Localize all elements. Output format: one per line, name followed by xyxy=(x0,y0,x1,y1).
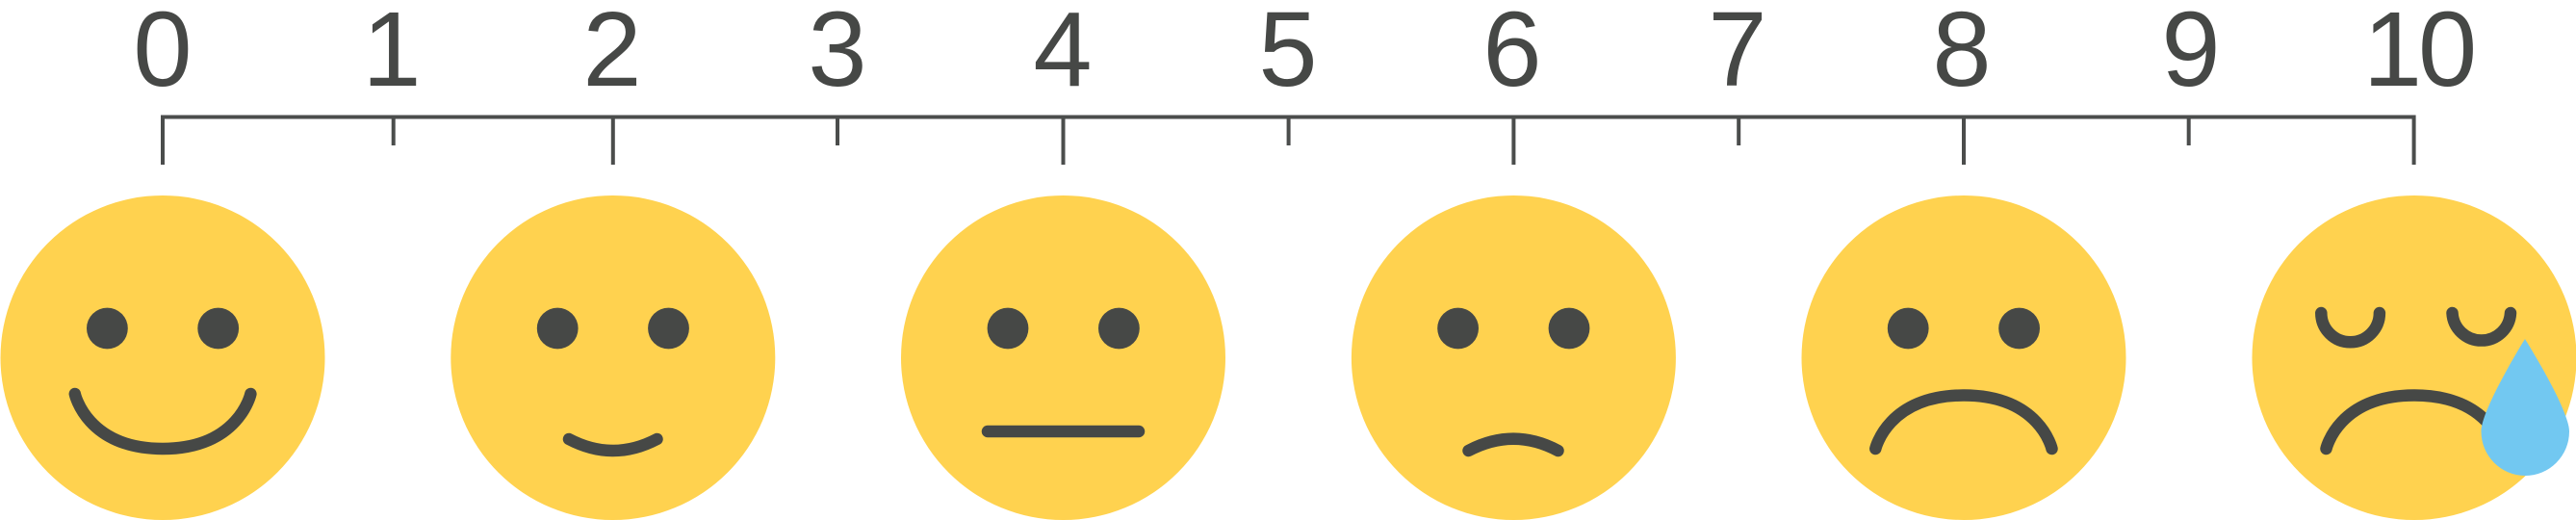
face 2: slight smile xyxy=(451,195,775,520)
scale axis with ticks xyxy=(163,117,2414,165)
face 10: crying xyxy=(2253,195,2576,520)
face 4: neutral xyxy=(901,195,1225,520)
face 6: slight frown xyxy=(1352,195,1676,520)
left closed eye xyxy=(2321,313,2380,342)
face 0: big smile xyxy=(0,195,325,520)
face 8: big frown xyxy=(1802,195,2125,520)
frown mouth xyxy=(2326,395,2503,449)
scale numbers xyxy=(133,0,2473,109)
right closed eye xyxy=(2453,313,2511,341)
icon: tear drop xyxy=(2482,339,2569,476)
